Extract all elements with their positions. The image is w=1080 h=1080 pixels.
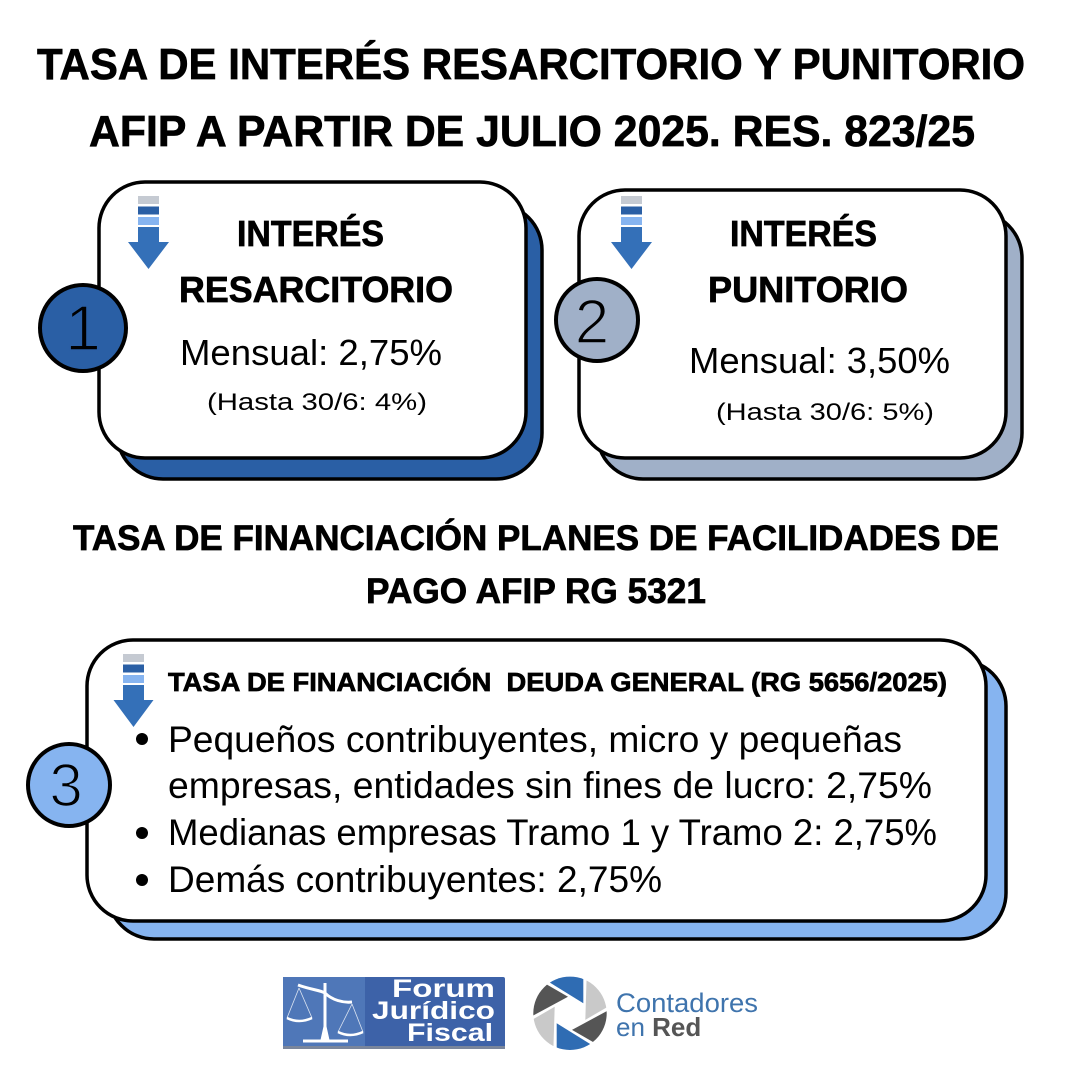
badge: 3: 3	[49, 752, 83, 819]
badge: 3	[28, 744, 110, 826]
icon: down arrow	[611, 196, 652, 269]
logo: Contadores en Red	[533, 976, 757, 1050]
section heading: tasa de financiación	[73, 518, 999, 611]
logo: Forum Jurídico Fiscal	[283, 975, 505, 1049]
bullet list: Pequeños contribuyentes, micro y pequeñas	[168, 719, 902, 760]
badge: 2	[556, 279, 638, 361]
bullet list: Medianas empresas Tramo 1 y Tramo 2: 2,75%	[168, 812, 937, 853]
panel: interés punitorio	[579, 190, 1022, 479]
icon: down arrow	[114, 654, 154, 727]
bullet list: empresas, entidades sin fines de lucro: 2,75%	[168, 765, 932, 806]
heading: interés resarcitorio: RESARCITORIO	[179, 269, 453, 310]
note: hasta 30/6 4%: (Hasta 30/6: 4%)	[207, 389, 427, 416]
heading: interés resarcitorio: INTERÉS	[237, 213, 384, 254]
logo: Forum Jurídico Fiscal: Forum	[392, 975, 495, 1003]
logo: Contadores en Red: Contadores	[616, 988, 758, 1018]
icon: aperture	[533, 976, 607, 1050]
section heading: tasa de financiación: PAGO AFIP RG 5321	[366, 572, 706, 611]
panel heading: TASA DE FINANCIACIÓN DEUDA GENERAL (RG 5656/2025)	[168, 667, 947, 697]
icon: down arrow	[128, 196, 169, 269]
title	[37, 39, 1025, 156]
heading: interés punitorio: INTERÉS	[730, 213, 877, 254]
icon: scales	[287, 983, 363, 1041]
badge: 1	[40, 285, 126, 371]
logo: Contadores en Red: en Red	[616, 1012, 701, 1042]
rate: mensual 3,50%: Mensual: 3,50%	[689, 340, 950, 381]
badge: 2: 2	[575, 288, 609, 357]
title: TASA DE INTERÉS RESARCITORIO Y PUNITORIO	[37, 39, 1025, 89]
heading: interés punitorio	[708, 213, 908, 310]
panel: deuda general	[87, 640, 1006, 939]
section heading: tasa de financiación: TASA DE FINANCIACIÓN PLANES DE FACILIDADES DE	[73, 518, 999, 558]
rate: mensual 2,75%: Mensual: 2,75%	[180, 332, 442, 373]
badge: 1: 1	[65, 292, 101, 364]
bullet list: Demás contribuyentes: 2,75%	[168, 859, 662, 900]
logo: Forum Jurídico Fiscal: Jurídico	[372, 997, 495, 1025]
heading: interés punitorio: PUNITORIO	[708, 269, 908, 310]
title: AFIP A PARTIR DE JULIO 2025. RES. 823/25	[89, 107, 975, 156]
logo: Forum Jurídico Fiscal: Fiscal	[407, 1019, 493, 1047]
panel: interés resarcitorio	[99, 182, 542, 479]
note: hasta 30/6 5%: (Hasta 30/6: 5%)	[716, 399, 934, 426]
bullet list	[136, 719, 937, 900]
heading: interés resarcitorio	[179, 213, 453, 310]
